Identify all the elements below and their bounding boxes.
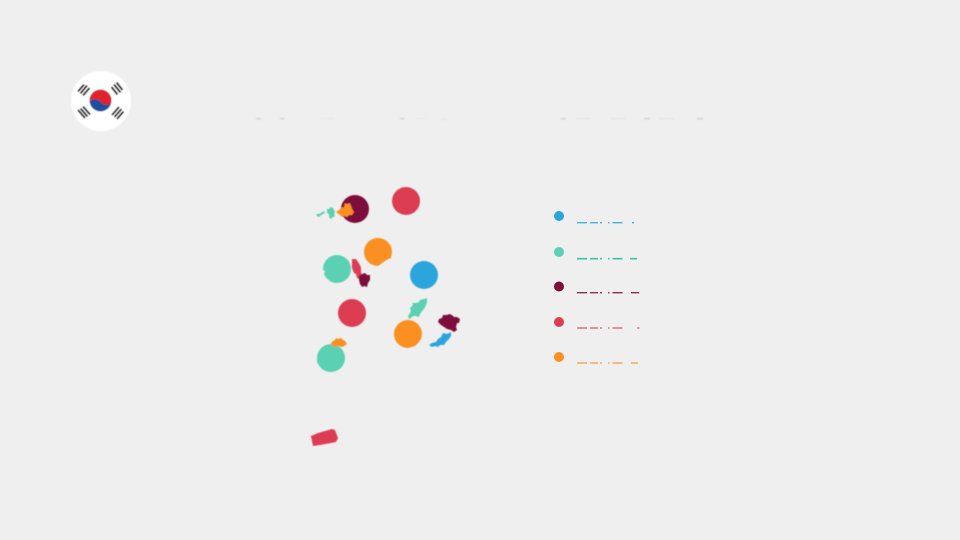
heading: faded title fragments <box>256 118 703 120</box>
legend item: teal <box>554 247 637 259</box>
bubble: blue east <box>410 261 438 289</box>
region: maroon Daegu area <box>359 273 370 287</box>
legend item: maroon <box>554 282 639 293</box>
region: maroon Ulsan area <box>438 314 460 332</box>
bubble: orange centre <box>364 238 392 266</box>
legend item: orange <box>554 352 638 363</box>
bubble: teal west <box>323 255 351 283</box>
icon: South Korean flag badge <box>71 71 131 131</box>
region: teal Gyeongnam inland <box>408 298 427 319</box>
legend item: blue <box>554 211 634 223</box>
region: blue Busan coast <box>429 332 451 347</box>
bubble: teal south-west <box>317 344 345 372</box>
region: orange Gwangju area <box>331 338 347 347</box>
legend item: red <box>554 317 640 328</box>
region: teal Incheon islands <box>316 207 335 219</box>
map: regions and bubbles <box>311 187 460 446</box>
bubble: maroon north <box>341 195 369 223</box>
legend <box>554 211 640 363</box>
region: red Daejeon area <box>352 259 362 279</box>
region: red Jeju island <box>311 429 338 446</box>
bubble: red north-east <box>392 187 420 215</box>
region: orange Seoul <box>336 203 354 217</box>
bubble: orange south-east <box>394 320 422 348</box>
bubble: red south-west <box>338 299 366 327</box>
